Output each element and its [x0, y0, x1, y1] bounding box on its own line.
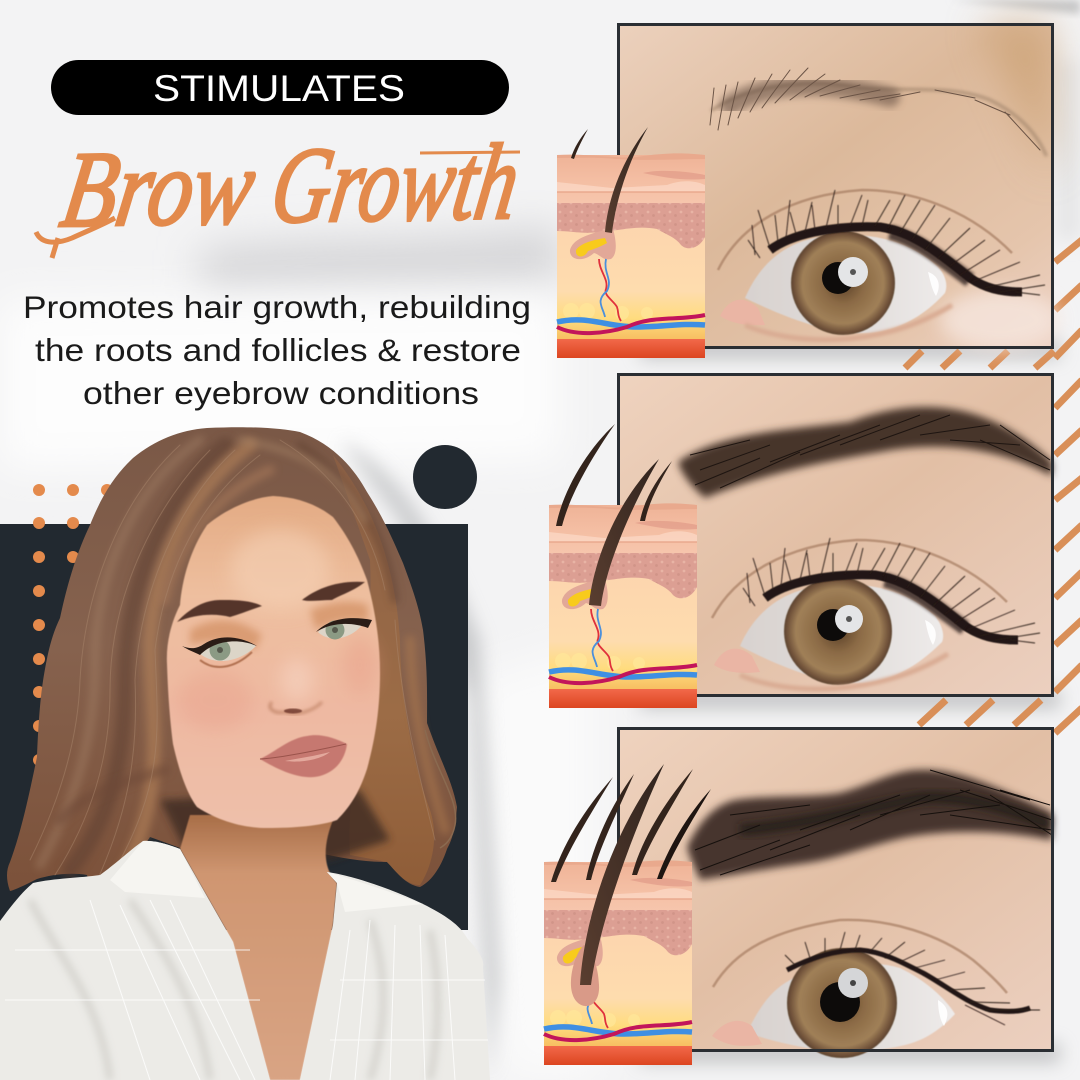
dark backdrop block — [0, 524, 468, 930]
crease — [712, 540, 1007, 618]
skin diagram: few hairs — [557, 127, 705, 358]
portrait: woman — [0, 427, 490, 1080]
title: brow growth — [36, 121, 527, 258]
decorative dots — [33, 484, 113, 496]
shadow under chin — [160, 790, 390, 860]
lash line — [787, 950, 1030, 1011]
dots over dark block — [33, 517, 79, 766]
skin diagram: more hairs — [549, 424, 697, 708]
panel border — [618, 728, 1052, 1050]
body text — [23, 289, 531, 411]
face — [167, 496, 380, 828]
hair mass — [7, 427, 457, 912]
panel: after eye — [617, 727, 1054, 1058]
crease — [718, 190, 1012, 270]
diagonal orange stripes — [905, 240, 1080, 733]
iris — [787, 948, 897, 1058]
eye right — [318, 622, 362, 638]
tear duct — [712, 1021, 762, 1046]
nose — [270, 702, 322, 714]
iris — [791, 231, 895, 335]
hair strands — [30, 440, 445, 885]
panel: before eye — [617, 23, 1060, 350]
eye shadow — [190, 620, 262, 650]
iris — [784, 577, 892, 685]
panel border — [618, 24, 1052, 348]
body text: the roots and follicles & restore — [35, 332, 521, 368]
stray hair loop — [425, 730, 456, 848]
tear duct — [714, 649, 760, 673]
tear duct — [720, 300, 765, 325]
body text: other eyebrow conditions — [83, 375, 479, 411]
shadow behind portrait — [340, 440, 500, 1080]
lips — [260, 735, 347, 777]
heading pill: stimulates: STIMULATES — [153, 68, 405, 109]
lash line — [765, 575, 1018, 640]
brows — [177, 600, 262, 622]
shirt left — [0, 841, 270, 1080]
panel: middle eye — [617, 373, 1054, 697]
sparse brow — [710, 68, 1046, 155]
heading pill: stimulates — [51, 60, 509, 115]
panel border — [618, 374, 1052, 696]
full brow — [687, 770, 1052, 880]
crease — [713, 920, 1007, 993]
title: brow growth: Brow — [54, 126, 263, 250]
lash line — [770, 227, 1022, 292]
eye white — [745, 235, 946, 333]
body text: Promotes hair growth, rebuilding — [23, 289, 531, 325]
eye white — [747, 964, 955, 1051]
panel shadows — [640, 340, 1060, 1062]
fuller brow — [678, 407, 1052, 498]
shirt folds — [30, 900, 438, 1080]
collars — [110, 841, 205, 898]
skin diagram: many hairs — [544, 764, 711, 1065]
cheeks — [177, 670, 253, 730]
shirt weave — [5, 900, 488, 1080]
neck — [180, 815, 337, 1080]
shirt right — [300, 872, 490, 1080]
eye left — [196, 639, 256, 661]
eye white — [740, 585, 943, 683]
dark circle — [413, 445, 477, 509]
title: brow growth: Growth — [264, 121, 527, 246]
